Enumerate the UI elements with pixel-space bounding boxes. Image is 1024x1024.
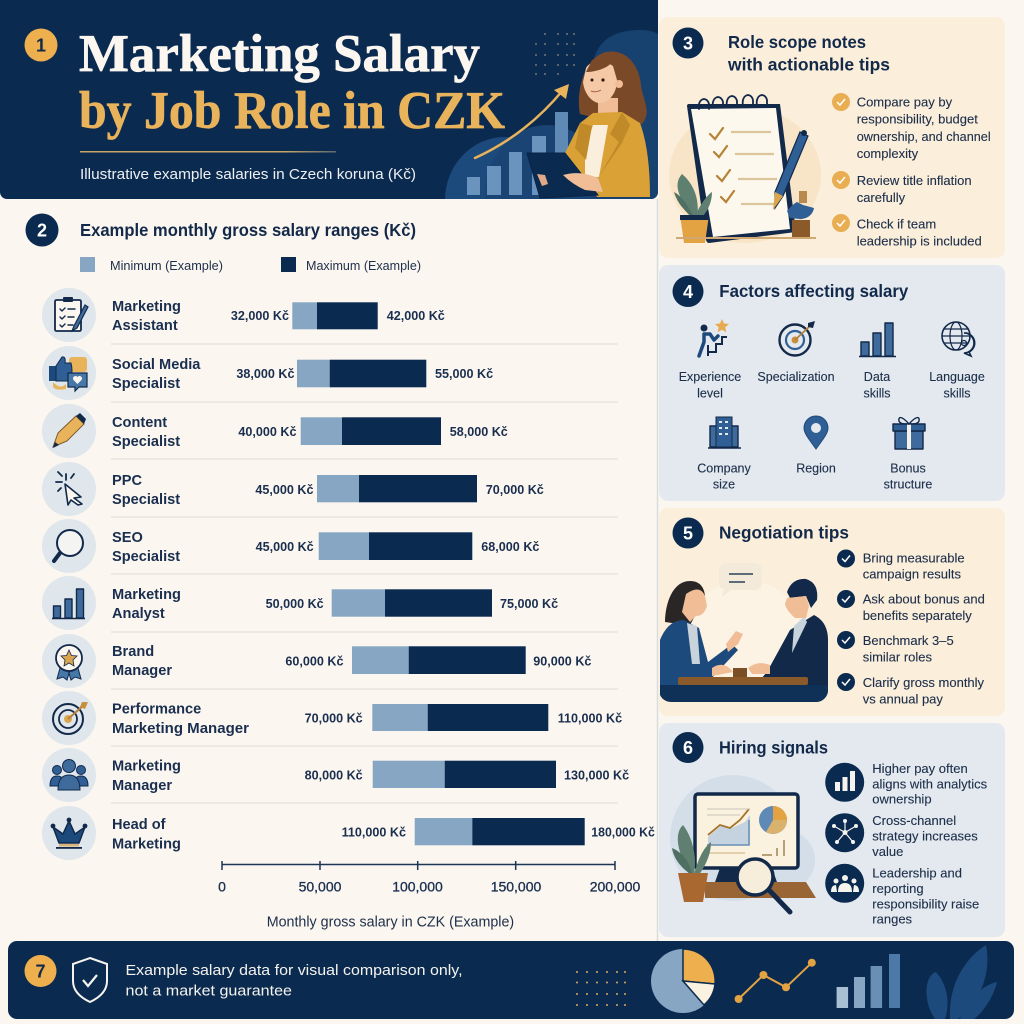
heading bbox=[727, 32, 890, 74]
axis title: Monthly gross salary in CZK (Example) bbox=[267, 914, 514, 930]
signal list: strategy increases bbox=[872, 828, 978, 844]
signal list: Higher pay often bbox=[872, 761, 968, 776]
row: Content Specialist: 58,000 Kč bbox=[450, 425, 508, 439]
row: Marketing Assistant: Assistant bbox=[112, 318, 178, 334]
disclaimer text: Example salary data for visual comparison only, bbox=[126, 962, 462, 979]
row: Performance Marketing Manager: 70,000 Kč bbox=[305, 712, 363, 726]
factor: specialization bbox=[757, 321, 835, 384]
row: Marketing Analyst: Analyst bbox=[112, 606, 165, 622]
factor: company size: Company bbox=[697, 462, 751, 476]
row: SEO Specialist bbox=[42, 519, 539, 573]
row: Marketing Manager bbox=[42, 748, 629, 802]
factor: bonus structure: Bonus bbox=[890, 462, 926, 476]
tip list: vs annual pay bbox=[863, 692, 943, 706]
row: Social Media Specialist bbox=[42, 346, 493, 400]
factor: region bbox=[796, 416, 836, 476]
row: Head of Marketing: Marketing bbox=[112, 836, 181, 852]
badge 5 bbox=[672, 518, 704, 548]
row: PPC Specialist: Specialist bbox=[112, 492, 180, 508]
row: Performance Marketing Manager: Performance bbox=[112, 702, 201, 718]
signal list: Leadership and bbox=[872, 866, 962, 880]
badge 3: 3 bbox=[683, 34, 693, 54]
icon: award ribbon bbox=[56, 645, 82, 680]
tip list: Ask about bonus and bbox=[863, 592, 985, 606]
tip list: Review title inflation bbox=[857, 173, 972, 188]
panel 5: negotiation tips bbox=[659, 508, 1005, 716]
row: Brand Manager: 90,000 Kč bbox=[533, 654, 591, 668]
factor: experience level: Experience bbox=[679, 370, 741, 384]
row: Marketing Manager: Marketing bbox=[112, 758, 181, 774]
section badge 2 bbox=[26, 214, 58, 246]
signal list bbox=[825, 761, 988, 926]
badge 5: 5 bbox=[683, 524, 693, 544]
row: SEO Specialist: 45,000 Kč bbox=[256, 540, 314, 554]
signal list: responsibility raise bbox=[872, 896, 979, 912]
heading: Negotiation tips bbox=[719, 522, 849, 542]
row: Head of Marketing: 180,000 Kč bbox=[591, 826, 655, 840]
signal list: aligns with analytics bbox=[872, 776, 988, 792]
row: PPC Specialist: 70,000 Kč bbox=[486, 483, 544, 497]
badge 3 bbox=[672, 28, 704, 58]
icon: pencil bbox=[53, 413, 86, 448]
title bbox=[79, 25, 505, 140]
row: Marketing Assistant: 42,000 Kč bbox=[387, 309, 445, 323]
tip list: Compare pay by bbox=[857, 94, 953, 110]
row: Head of Marketing: 110,000 Kč bbox=[342, 826, 406, 840]
row: Social Media Specialist: Specialist bbox=[112, 376, 180, 392]
icon: cursor click bbox=[56, 472, 82, 505]
factor: data skills: skills bbox=[863, 386, 891, 400]
badge 6 bbox=[672, 732, 704, 763]
factor: data skills: Data bbox=[864, 370, 890, 384]
panel 4: factors affecting salary bbox=[659, 265, 1005, 501]
title: by Job Role in CZK bbox=[79, 82, 505, 140]
section badge 1: 1 bbox=[36, 36, 46, 56]
factor: company size bbox=[697, 417, 751, 492]
row: SEO Specialist: SEO bbox=[112, 530, 143, 546]
row: Social Media Specialist: 55,000 Kč bbox=[435, 367, 493, 381]
row: Content Specialist bbox=[42, 404, 508, 458]
line chart bbox=[735, 959, 816, 1003]
tip list: similar roles bbox=[863, 650, 933, 664]
title: Marketing Salary bbox=[79, 25, 480, 83]
row: SEO Specialist: 68,000 Kč bbox=[481, 540, 539, 554]
legend: Maximum (Example) bbox=[306, 259, 421, 273]
row: Marketing Assistant bbox=[42, 288, 445, 342]
pie chart bbox=[651, 949, 715, 1013]
badge 6: 6 bbox=[683, 738, 693, 758]
legend bbox=[80, 257, 421, 273]
panel 3: role scope notes bbox=[659, 17, 1005, 258]
footer banner bbox=[8, 941, 1014, 1024]
chart axis: 50,000 bbox=[299, 878, 342, 894]
row: Marketing Analyst: 75,000 Kč bbox=[500, 597, 558, 611]
row: Performance Marketing Manager: Marketing Manager bbox=[112, 721, 249, 737]
header illustration: growth chart and woman with tablet bbox=[445, 30, 658, 199]
tip list: ownership, and channel bbox=[857, 129, 991, 144]
row: Brand Manager: 60,000 Kč bbox=[285, 654, 344, 668]
row: Content Specialist: Specialist bbox=[112, 434, 180, 450]
icon: crown bbox=[51, 818, 87, 849]
heading: Role scope notes bbox=[728, 32, 866, 52]
signal list: ranges bbox=[872, 912, 913, 926]
row: PPC Specialist bbox=[42, 462, 544, 516]
tip list: carefully bbox=[857, 190, 906, 205]
factor: data skills bbox=[859, 323, 896, 400]
factor: language skills bbox=[929, 322, 985, 400]
row: Marketing Analyst: Marketing bbox=[112, 587, 181, 603]
signal list: reporting bbox=[872, 881, 924, 896]
decorative leaf bbox=[926, 945, 997, 1024]
chart axis: 150,000 bbox=[491, 878, 542, 894]
factor: experience level: level bbox=[697, 386, 723, 400]
row: Head of Marketing: Head of bbox=[112, 817, 166, 833]
factor: region: Region bbox=[796, 462, 836, 476]
row: Content Specialist: 40,000 Kč bbox=[238, 425, 296, 439]
subtitle: Illustrative example salaries in Czech koruna (Kč) bbox=[80, 166, 416, 183]
signal list: Cross-channel bbox=[872, 813, 956, 828]
factor: specialization: Specialization bbox=[757, 370, 835, 384]
disclaimer text: not a market guarantee bbox=[126, 982, 292, 1000]
row: Brand Manager: Brand bbox=[112, 644, 154, 660]
row: Marketing Analyst bbox=[42, 576, 558, 630]
header banner bbox=[0, 0, 658, 199]
factor: language skills: skills bbox=[943, 386, 971, 400]
row: Marketing Analyst: 50,000 Kč bbox=[266, 597, 324, 611]
chart axis: 200,000 bbox=[590, 878, 641, 894]
heading: with actionable tips bbox=[727, 54, 890, 74]
badge 7: 7 bbox=[35, 962, 46, 982]
tip list: Benchmark 3–5 bbox=[863, 633, 954, 648]
tip list: responsibility, budget bbox=[857, 112, 978, 126]
tip list: Clarify gross monthly bbox=[863, 675, 985, 690]
decorative dots bbox=[576, 971, 626, 1006]
row: SEO Specialist: Specialist bbox=[112, 549, 180, 565]
signal list: ownership bbox=[872, 792, 932, 806]
icon: magnifier bbox=[54, 530, 83, 561]
chart axis: 0 bbox=[218, 878, 226, 894]
section badge 1 bbox=[24, 28, 58, 62]
row: Content Specialist: Content bbox=[112, 415, 167, 431]
row: Head of Marketing bbox=[42, 806, 655, 860]
row: Brand Manager: Manager bbox=[112, 663, 172, 679]
tip list: Check if team bbox=[857, 216, 936, 232]
row: PPC Specialist: 45,000 Kč bbox=[255, 483, 314, 497]
illustration: two people negotiating at a table bbox=[660, 563, 830, 702]
row: Marketing Manager: 130,000 Kč bbox=[564, 768, 629, 782]
salary range chart bbox=[42, 288, 655, 860]
chart axis: 100,000 bbox=[392, 878, 443, 894]
badge 7 bbox=[24, 955, 56, 987]
illustration: notepad checklist with pen and plants bbox=[669, 95, 821, 243]
row: Performance Marketing Manager: 110,000 Kč bbox=[558, 712, 622, 726]
row: Marketing Assistant: Marketing bbox=[112, 299, 181, 315]
tip list: campaign results bbox=[863, 566, 961, 582]
factor: bonus structure bbox=[884, 418, 932, 492]
panel 6: hiring signals bbox=[659, 723, 1005, 937]
icon: bar chart bbox=[52, 589, 85, 618]
signal list: value bbox=[872, 844, 903, 859]
tip list: complexity bbox=[857, 146, 919, 161]
row: Marketing Manager: 80,000 Kč bbox=[305, 768, 363, 782]
row: PPC Specialist: PPC bbox=[112, 473, 142, 489]
icon: social reactions bbox=[49, 357, 87, 391]
icon: shield check bbox=[73, 958, 107, 1002]
icon: clipboard checklist bbox=[55, 297, 88, 331]
row: Marketing Manager: Manager bbox=[112, 778, 172, 794]
row: Social Media Specialist: Social Media bbox=[112, 357, 201, 373]
badge 4 bbox=[672, 276, 704, 307]
row: Marketing Assistant: 32,000 Kč bbox=[231, 309, 289, 323]
factor: language skills: Language bbox=[929, 370, 985, 384]
factor: bonus structure: structure bbox=[884, 478, 932, 492]
tip list: benefits separately bbox=[863, 608, 972, 623]
tip list: Bring measurable bbox=[863, 550, 965, 566]
heading: Factors affecting salary bbox=[719, 281, 909, 301]
illustration: monitor dashboard, plant and magnifier bbox=[670, 775, 816, 912]
legend: Minimum (Example) bbox=[110, 259, 223, 273]
row: Brand Manager bbox=[42, 634, 591, 688]
icon: target with dart bbox=[53, 702, 88, 734]
tip list: leadership is included bbox=[857, 234, 982, 248]
factor: company size: size bbox=[713, 478, 735, 492]
icon: team bbox=[50, 760, 88, 790]
disclaimer text bbox=[126, 962, 462, 1000]
chart heading: Example monthly gross salary ranges (Kč) bbox=[80, 220, 416, 240]
row: Performance Marketing Manager bbox=[42, 691, 622, 745]
tip list bbox=[832, 93, 991, 248]
factor: experience level bbox=[679, 319, 741, 400]
bar chart bbox=[837, 954, 900, 1008]
section badge 2: 2 bbox=[37, 220, 47, 240]
tip list bbox=[837, 550, 985, 706]
badge 4: 4 bbox=[683, 282, 693, 302]
chart axis bbox=[218, 861, 641, 894]
heading: Hiring signals bbox=[719, 738, 828, 758]
row: Social Media Specialist: 38,000 Kč bbox=[236, 367, 294, 381]
